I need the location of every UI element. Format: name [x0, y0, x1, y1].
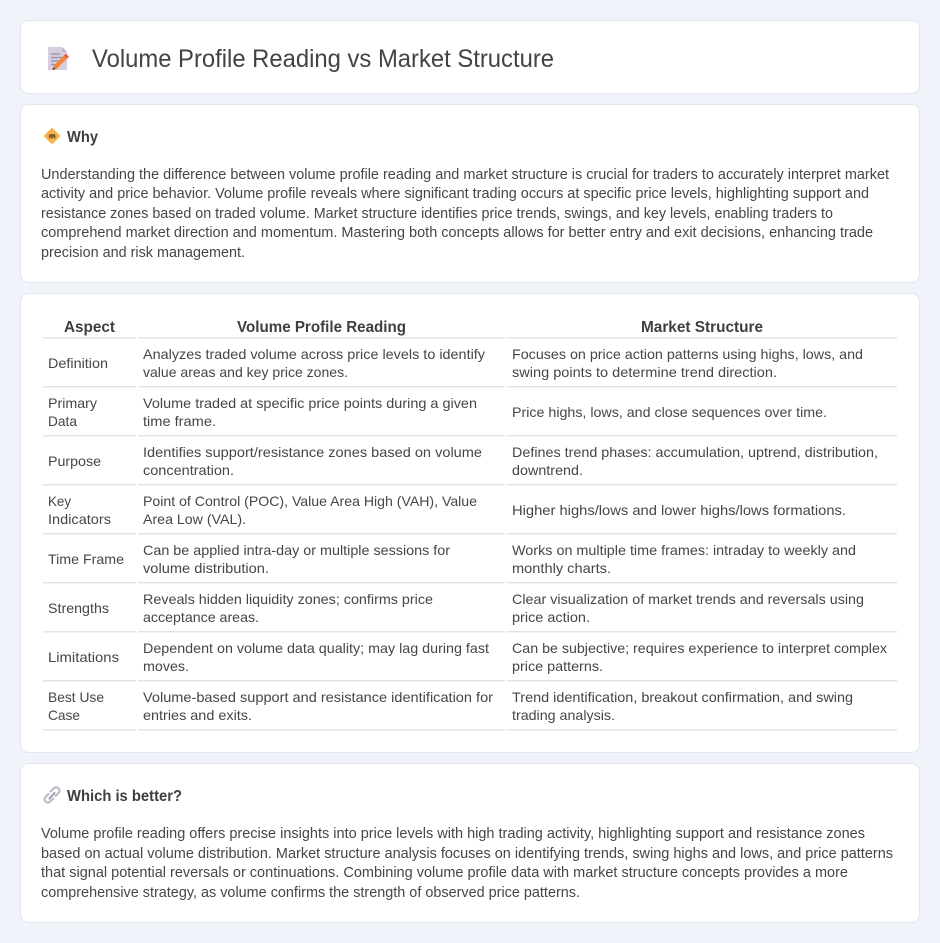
- icon: orange diamond sign: [44, 128, 60, 144]
- panel: title header: [20, 20, 920, 94]
- text block: why explanation: comprehend market direction and momentum. Mastering both concepts allows for better entry and exit decisions, enhancing trade: [41, 225, 873, 241]
- panel: which is better: [20, 764, 920, 922]
- table header row: [43, 319, 897, 338]
- row: time frame: Time Frame: [48, 551, 124, 567]
- row: limitations: Limitations: [48, 649, 119, 665]
- row: primary data: Price highs, lows, and close sequences over time.: [512, 404, 827, 420]
- row: time frame: Can be applied intra-day or multiple sessions for: [143, 542, 450, 558]
- row: definition: Analyzes traded volume across price levels to identify: [143, 346, 485, 362]
- row: definition: [43, 346, 897, 388]
- panel: comparison table: [20, 294, 920, 752]
- row: time frame: [43, 542, 897, 584]
- icon: chain link: [45, 787, 59, 802]
- row: time frame: Works on multiple time frames: intraday to weekly and: [512, 542, 856, 558]
- row: purpose: Identifies support/resistance zones based on volume: [143, 444, 482, 460]
- row: key indicators: Higher highs/lows and lower highs/lows formations.: [512, 502, 846, 518]
- text block: why explanation: Understanding the difference between volume profile reading and market structure is crucial for traders to accurately interpret market: [41, 167, 889, 183]
- row: best use case: Best Use: [48, 689, 104, 705]
- title: Volume Profile Reading vs Market Structure: [92, 45, 554, 73]
- table header row: Aspect: [64, 319, 116, 336]
- text block: why explanation: [41, 167, 889, 261]
- row: purpose: Defines trend phases: accumulation, uptrend, distribution,: [512, 444, 878, 460]
- row: limitations: price patterns.: [512, 658, 603, 674]
- panel: why: [20, 104, 920, 282]
- row: best use case: [43, 689, 897, 730]
- row: strengths: price action.: [512, 609, 590, 625]
- table header row: Volume Profile Reading: [237, 319, 406, 336]
- row: primary data: Data: [48, 413, 77, 429]
- row: primary data: Primary: [48, 395, 97, 411]
- row: best use case: Trend identification, breakout confirmation, and swing: [512, 689, 853, 705]
- row: key indicators: Area Low (VAL).: [143, 511, 246, 527]
- icon: memo with pencil: [48, 47, 69, 70]
- row: purpose: Purpose: [48, 453, 101, 469]
- text block: why explanation: resistance zones based on traded volume. Market structure identifies price trends, swings, and key levels, enabling traders to: [41, 206, 833, 222]
- row: limitations: Can be subjective; requires experience to interpret complex: [512, 640, 887, 656]
- row: key indicators: Point of Control (POC), Value Area High (VAH), Value: [143, 493, 477, 509]
- row: time frame: volume distribution.: [143, 560, 269, 576]
- table header row: Market Structure: [641, 319, 763, 336]
- row: strengths: Reveals hidden liquidity zones; confirms price: [143, 591, 433, 607]
- text block: verdict: comprehensive strategy, as volume confirms the strength of observed price patterns.: [41, 885, 580, 901]
- row: key indicators: Key: [48, 493, 71, 509]
- row: limitations: [43, 640, 897, 682]
- row: definition: Definition: [48, 355, 108, 371]
- heading: which is better: Which is better?: [67, 788, 182, 805]
- row: limitations: Dependent on volume data quality; may lag during fast: [143, 640, 489, 656]
- text block: why explanation: precision and risk management.: [41, 245, 245, 261]
- row: primary data: time frame.: [143, 413, 216, 429]
- row: purpose: concentration.: [143, 462, 234, 478]
- row: best use case: trading analysis.: [512, 707, 615, 723]
- row: best use case: Case: [48, 707, 80, 723]
- row: key indicators: Indicators: [48, 511, 111, 527]
- row: strengths: [43, 591, 897, 632]
- row: primary data: [43, 395, 897, 436]
- row: time frame: monthly charts.: [512, 560, 611, 576]
- row: purpose: downtrend.: [512, 462, 583, 478]
- row: limitations: moves.: [143, 658, 189, 674]
- row: definition: value areas and key price zones.: [143, 364, 348, 380]
- text block: why explanation: activity and price behavior. Volume profile reveals where significant trading occurs at specific price levels, highlighting support and: [41, 186, 869, 202]
- row: primary data: Volume traded at specific price points during a given: [143, 395, 477, 411]
- text block: verdict: [41, 826, 893, 901]
- row: strengths: Clear visualization of market trends and reversals using: [512, 591, 864, 607]
- row: definition: Focuses on price action patterns using highs, lows, and: [512, 346, 863, 362]
- text block: verdict: that signal potential reversals or continuations. Combining volume profile data with market structure concepts provides a more: [41, 865, 848, 881]
- text block: verdict: based on actual volume distribution. Market structure analysis focuses on identifying trends, swing highs and lows, and price patterns: [41, 846, 893, 862]
- text block: verdict: Volume profile reading offers precise insights into price levels with high trading activity, highlighting support and resistance zones: [41, 826, 865, 842]
- row: best use case: entries and exits.: [143, 707, 252, 723]
- row: strengths: acceptance areas.: [143, 609, 259, 625]
- row: strengths: Strengths: [48, 600, 109, 616]
- row: purpose: [43, 444, 897, 486]
- heading: why: Why: [67, 129, 98, 146]
- row: key indicators: [43, 493, 897, 534]
- row: definition: swing points to determine trend direction.: [512, 364, 777, 380]
- row: best use case: Volume-based support and resistance identification for: [143, 689, 493, 705]
